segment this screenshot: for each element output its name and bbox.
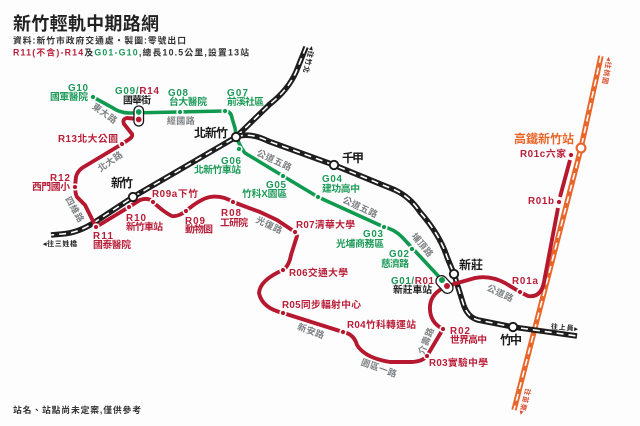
red station labels: R12 (50, 173, 71, 184)
road labels: 園區一路 (360, 356, 399, 379)
red station labels: R13北大公園 (58, 132, 118, 145)
red station labels: R08 (221, 208, 242, 219)
HSR station circle (577, 144, 585, 152)
railway station names: 北新竹 (194, 125, 228, 140)
red station labels: 新竹車站 (126, 220, 163, 233)
railway station names: 新莊 (459, 257, 483, 272)
direction label: to Sanxing bridge: ◂往三姓橋 (42, 239, 77, 248)
red station labels: R07清華大學 (296, 218, 355, 231)
red station labels: R05同步輻射中心 (282, 298, 361, 311)
red station labels: 世界高中 (450, 333, 487, 346)
green station labels: 慈濟路 (381, 257, 409, 270)
red station labels: R09a下竹 (152, 187, 198, 200)
interchange station names: 新莊車站 (393, 283, 432, 296)
green station labels: G08 (168, 88, 189, 99)
red line (75, 118, 570, 362)
source credit: 資料:新竹市政府交通處・製圖:零號出口 (13, 34, 186, 46)
green station labels: G01/R01 (391, 276, 435, 287)
road labels: 埔頂路 (409, 230, 436, 259)
red station labels: 西門國小 (32, 180, 70, 193)
red station labels: 動物園 (185, 222, 213, 236)
green station labels: 國軍醫院 (50, 90, 88, 103)
red station labels: R01b (528, 196, 554, 207)
railway station names: 新竹 (111, 175, 133, 190)
direction label: to Taoyuan: ◂往桃園 (600, 56, 614, 85)
railway station names (111, 125, 522, 347)
road labels: 新安路 (296, 321, 326, 341)
green station labels: 光埔商務區 (336, 237, 384, 250)
TRA main railway (51, 47, 306, 235)
red station labels: R09 (185, 216, 206, 227)
red station labels: R06交通大學 (289, 266, 348, 279)
green station dots (90, 94, 415, 252)
direction label: to Zhubei: ◂往竹北 (301, 45, 317, 74)
title: 新竹輕軌中期路網 (13, 13, 159, 34)
green station labels: 竹科X園區 (242, 187, 287, 200)
road labels: 四維路 (63, 194, 87, 224)
green station labels: G05 (266, 180, 287, 191)
road labels: 經國路 (167, 115, 195, 126)
green station labels: G10 (68, 83, 89, 94)
road labels: 光復路 (254, 214, 285, 236)
green station labels: G06 (221, 156, 242, 167)
red station dots (72, 141, 574, 359)
green station labels: 台大醫院 (169, 95, 207, 108)
green station labels: 北新竹車站 (194, 163, 241, 176)
station: G01/R01 interchange capsule (434, 273, 455, 296)
red station labels: R01a (512, 276, 539, 287)
road labels: 東大路 (90, 101, 120, 126)
green station labels: 前溪社區 (227, 95, 264, 108)
green station labels: G03 (363, 229, 384, 240)
red station labels: R02 (450, 326, 471, 337)
green station labels: 建功高中 (322, 182, 360, 195)
green station labels: G04 (322, 174, 343, 185)
interchange station names (123, 94, 432, 296)
station: G09/R14 interchange capsule (134, 106, 144, 126)
direction label: to Shangyuan: 往上員▸ (551, 322, 579, 333)
railway station names: 千甲 (342, 151, 364, 165)
Neiwan railway branch (236, 135, 577, 336)
disclaimer note: 站名、站點尚未定案,僅供參考 (13, 404, 141, 415)
red station labels: R04竹科轉運站 (347, 318, 416, 331)
red station labels: R10 (126, 213, 147, 224)
railway station names: 竹中 (500, 332, 522, 347)
road labels: 北大路 (95, 149, 125, 174)
red station labels (32, 132, 566, 369)
road labels: 公道五路 (341, 194, 380, 220)
green station labels (50, 83, 435, 287)
green station labels: G09/R14 (115, 86, 160, 97)
red station labels: 工研院 (220, 216, 248, 229)
green line (93, 97, 442, 280)
interchange station names: 國華街 (123, 94, 151, 106)
green station labels: G07 (227, 88, 249, 99)
road labels: 介壽路 (415, 326, 436, 356)
red station labels: 國泰醫院 (93, 238, 131, 251)
route summary: R11(不含)-R14及G01-G10,總長10.5公里,設置13站 (13, 46, 249, 58)
HSR station name: 高鐵新竹站 (514, 131, 574, 146)
railway station circles (129, 133, 517, 331)
road labels: 公道五路 (255, 147, 294, 173)
red station labels: R01c六家 (520, 147, 566, 160)
road labels: 公道路 (485, 282, 516, 304)
red station labels: R11 (93, 231, 114, 242)
red station labels: R03實驗中學 (429, 356, 488, 369)
road labels (63, 101, 516, 379)
high speed rail line (514, 56, 601, 410)
direction label: to Miaoli: 往苗栗▸ (517, 387, 533, 416)
green station labels: G02 (389, 249, 410, 260)
